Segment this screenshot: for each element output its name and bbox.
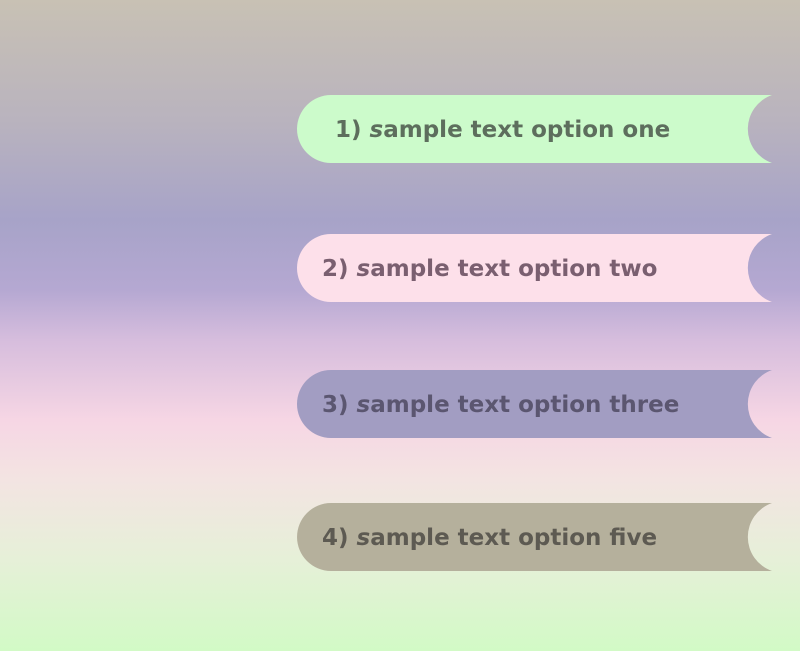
option 3 bar	[297, 370, 772, 438]
option 1 text: 1) sample text option one	[335, 117, 670, 143]
option 4 text: 4) sample text option five	[322, 525, 657, 551]
option 1 bar	[297, 95, 772, 163]
option 3 text: 3) sample text option three	[322, 392, 679, 418]
option 2 bar	[297, 234, 772, 302]
option 4 bar	[297, 503, 772, 571]
option 2 text: 2) sample text option two	[322, 256, 657, 282]
